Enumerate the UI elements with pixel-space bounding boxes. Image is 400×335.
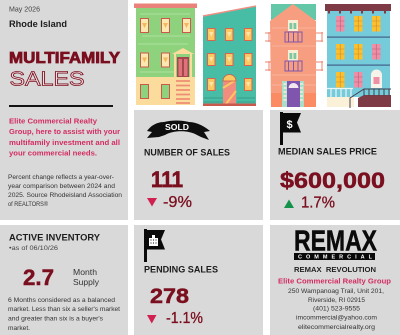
intro text: your commercial needs.: [9, 148, 97, 158]
icon: teal building: [203, 6, 256, 106]
as-of date: •as of 06/10/26: [9, 246, 59, 252]
footnote: Percent change reflects a year-over-: [8, 174, 114, 181]
logo: remax commercial: COMMERCIAL: [298, 254, 373, 260]
icon: building flag: [144, 229, 165, 262]
explanation: [8, 297, 120, 332]
value: 111: [151, 167, 183, 192]
icon: green building: [134, 4, 197, 105]
footnote: year comparison between 2024 and: [8, 183, 116, 190]
footnote: 2025. Source Rhodeisland Association: [8, 192, 123, 199]
intro text: [9, 116, 120, 158]
address and contact: [288, 288, 384, 331]
panel: number of sales: [134, 110, 263, 220]
title: sales outlined: SALES: [10, 68, 84, 90]
label: MEDIAN SALES PRICE: [278, 146, 377, 156]
change: -1.1%: [166, 310, 203, 327]
address and contact: elitecommercialrealty.org: [298, 324, 375, 331]
icon: down triangle: [147, 198, 157, 206]
panel: active inventory: [0, 225, 128, 335]
footnote: of REALTORS®: [8, 200, 48, 208]
explanation: market. Less than six a seller's market: [8, 306, 120, 313]
address and contact: (401) 523-9555: [313, 306, 360, 312]
value: 278: [150, 285, 189, 308]
address and contact: Riverside, RI 02915: [308, 297, 365, 304]
value: 2.7: [23, 265, 54, 290]
divider bar: [9, 105, 113, 107]
logo: remax commercial: REMAX: [294, 226, 378, 258]
unit: Month: [73, 267, 97, 277]
label: PENDING SALES: [144, 264, 218, 274]
title: multifamily: MULTIFAMILY: [9, 50, 121, 67]
intro text: Group, here to assist with your: [9, 127, 120, 136]
panel: median sales price: [270, 110, 400, 220]
group name: Elite Commercial Realty Group: [278, 276, 391, 286]
value: $600,000: [280, 168, 385, 193]
heading: ACTIVE INVENTORY: [9, 232, 101, 244]
explanation: 6 Months considered as a balanced: [8, 297, 116, 304]
icon: up triangle: [284, 200, 294, 208]
label: NUMBER OF SALES: [144, 148, 230, 158]
icon: sold ribbon: SOLD: [165, 122, 189, 132]
address and contact: imcommercial@yahoo.com: [296, 314, 377, 322]
unit: [73, 267, 100, 287]
region heading: Rhode Island: [9, 19, 67, 29]
address and contact: 250 Wampanoag Trail, Unit 201,: [288, 288, 384, 295]
icon: blue building: [325, 4, 391, 108]
date: May 2026: [9, 6, 40, 14]
change: 1.7%: [301, 194, 335, 212]
intro text: Elite Commercial Realty: [9, 116, 98, 126]
unit: Supply: [73, 277, 100, 287]
panel: contact: [270, 225, 400, 335]
change: -9%: [163, 194, 192, 211]
panel: pending sales: [134, 225, 263, 335]
explanation: and greater than six is a buyer's: [8, 316, 103, 322]
icon: dollar flag: $: [286, 119, 293, 131]
explanation: market.: [8, 325, 30, 332]
office name: REMAX REVOLUTION: [294, 265, 376, 274]
panel: title and intro: [0, 0, 128, 220]
footnote: [8, 174, 123, 208]
icon: down triangle: [147, 315, 156, 324]
icon: salmon building: [265, 4, 323, 107]
intro text: multifamily investment and all: [9, 138, 120, 147]
